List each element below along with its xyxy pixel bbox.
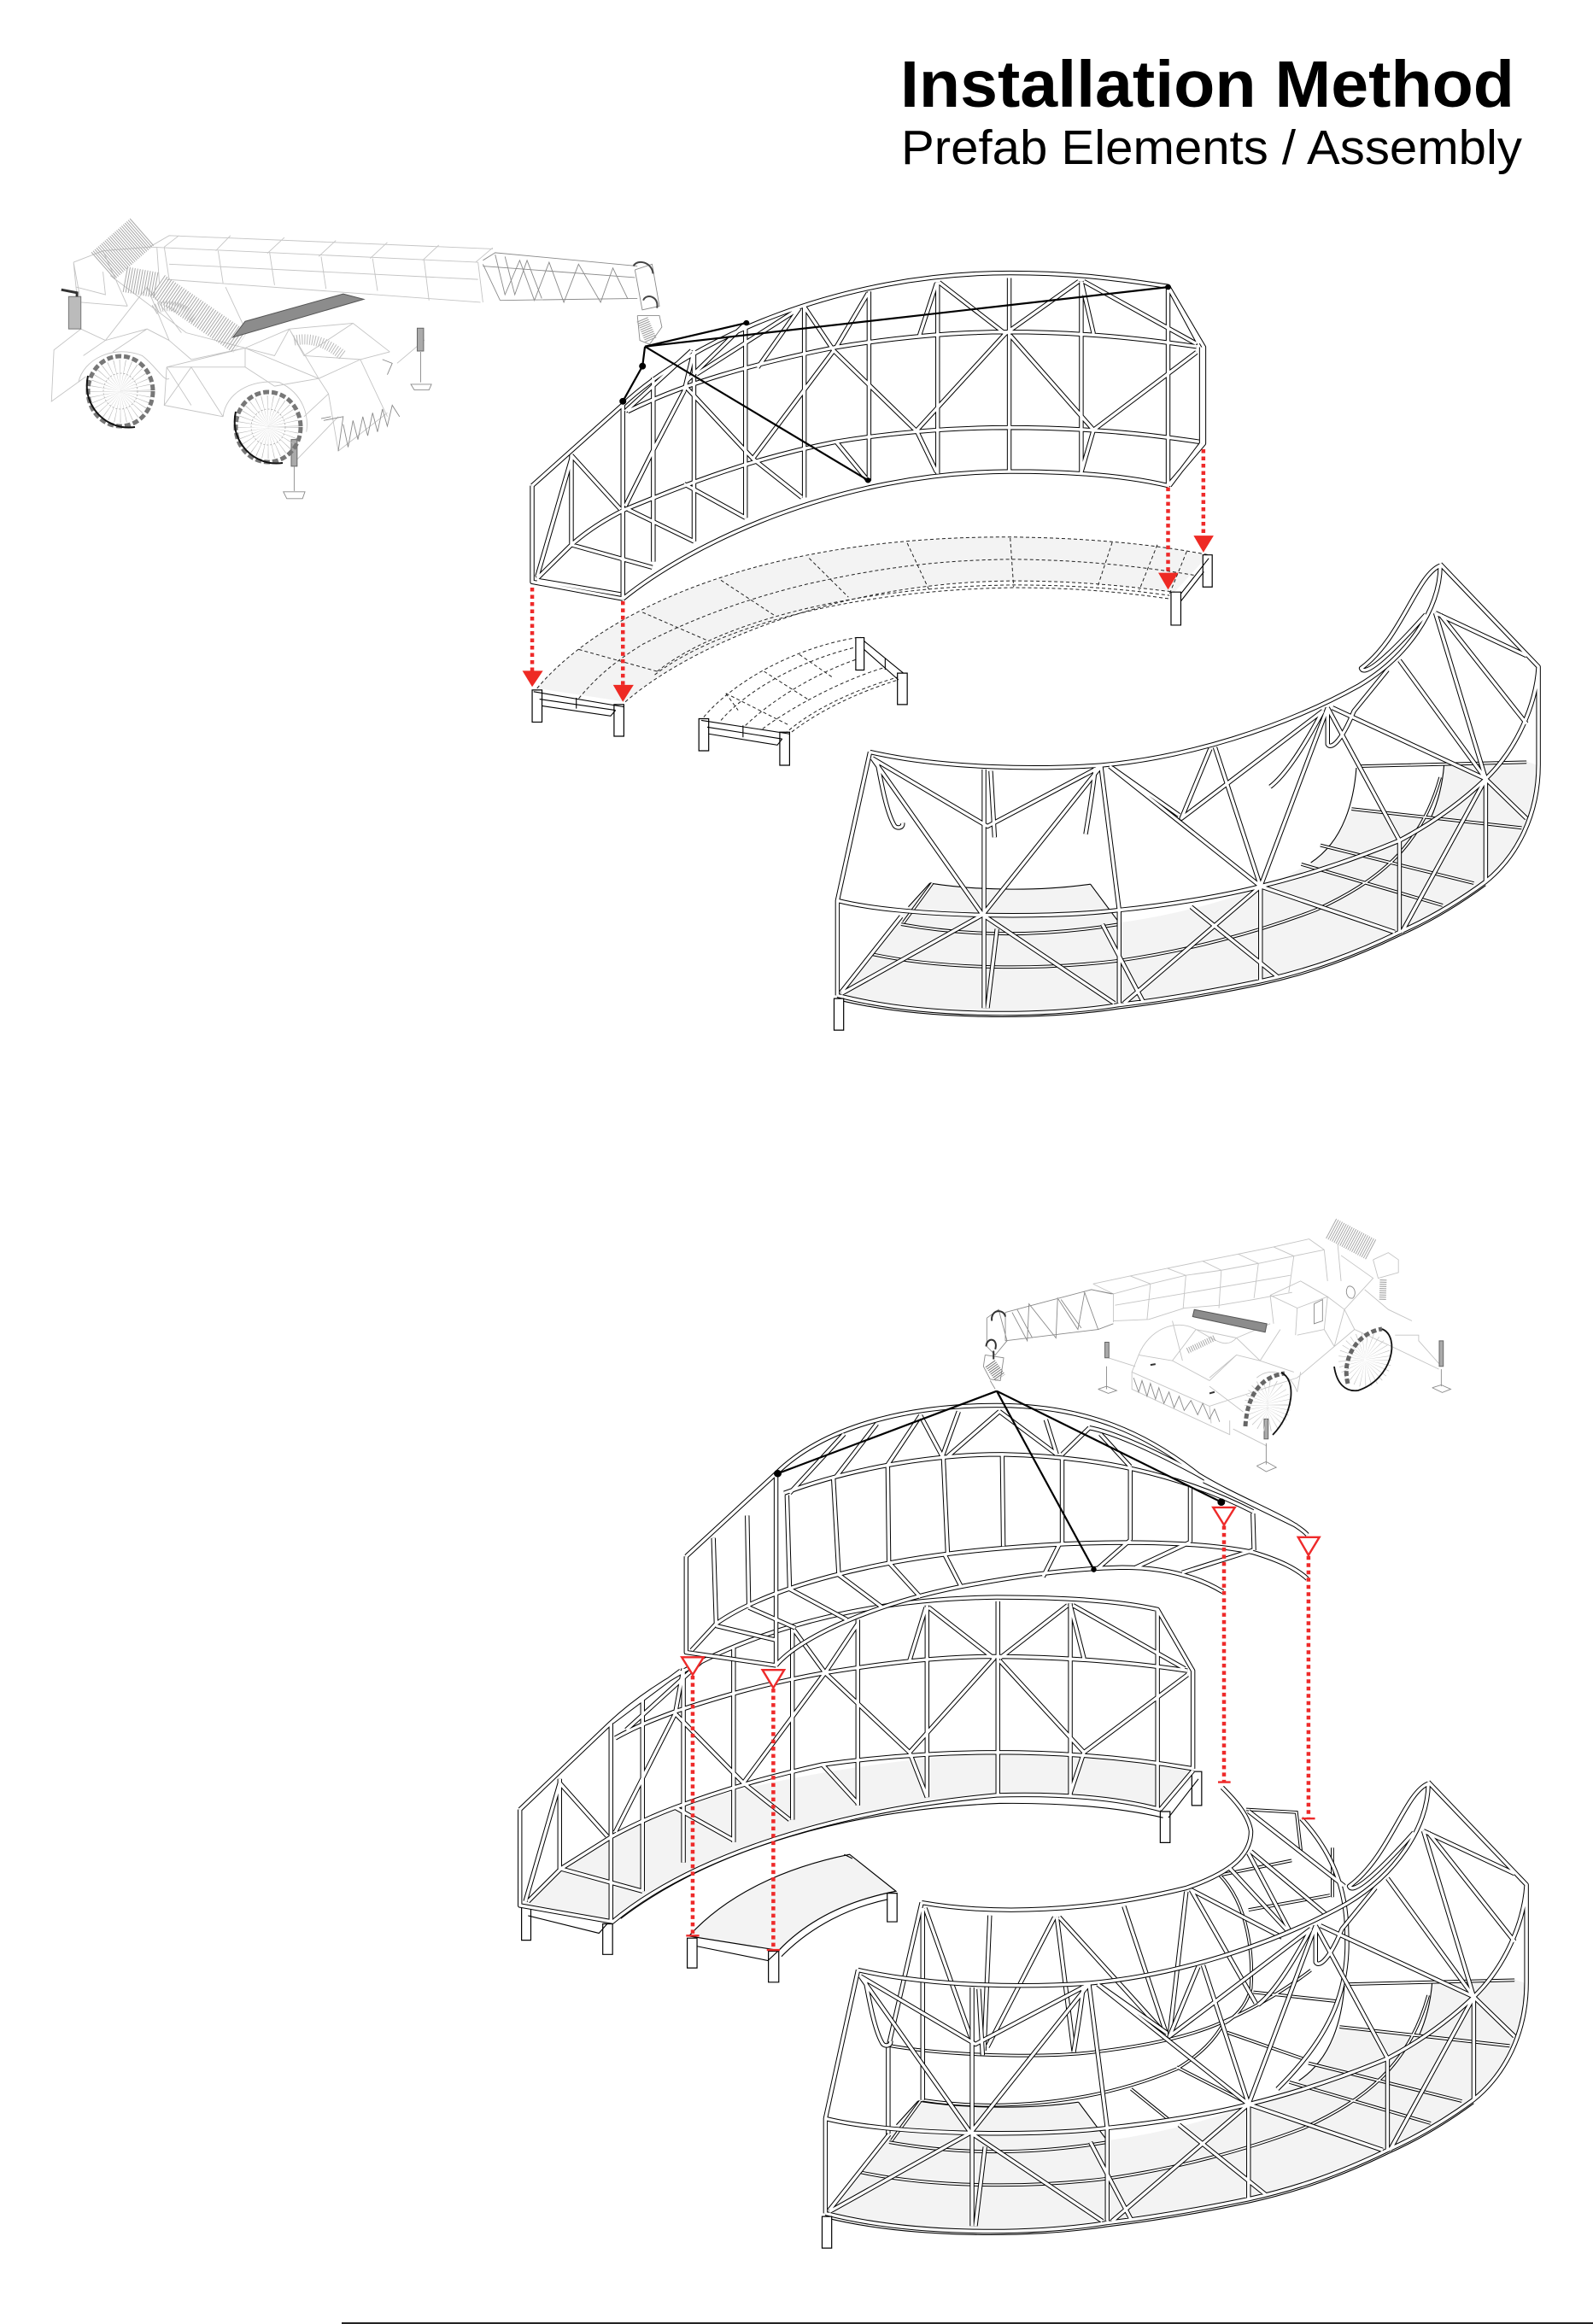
title: Installation Method	[900, 48, 1514, 121]
icon: crane wheel front	[235, 392, 301, 464]
panel: step 2 seated truss, bench and lowered truss	[520, 1391, 1308, 1982]
lowered truss frame	[686, 1405, 1308, 1665]
panel: step 1 assembled module	[834, 564, 1538, 1030]
panel: step 2 front truss module	[822, 1782, 1526, 2248]
dashed large bench slab	[532, 537, 1212, 736]
seated truss on bench	[520, 1597, 1202, 1954]
prefab truss frame	[532, 273, 1204, 599]
solid bench slab	[688, 1854, 897, 1982]
red alignment markers	[682, 1507, 1320, 1950]
red placement arrows	[523, 449, 1214, 702]
dashed small bench slab	[699, 637, 907, 765]
icon: crane wheel front	[1245, 1373, 1291, 1435]
lifting cables	[619, 284, 1171, 483]
lifting cables	[774, 1391, 1225, 1572]
footer rule	[342, 2322, 1593, 2324]
icon: crane wheel rear	[1334, 1329, 1391, 1390]
subtitle: Prefab Elements / Assembly	[901, 120, 1523, 175]
panel: step 2 back truss being nested	[887, 1788, 1347, 2157]
crane: lower, lifting truss from the right	[983, 1228, 1450, 1472]
panel: step 1 prefab truss and benches	[523, 273, 1214, 765]
icon: crane wheel rear	[87, 356, 153, 428]
crane: upper, lifting truss from the left	[51, 231, 662, 499]
